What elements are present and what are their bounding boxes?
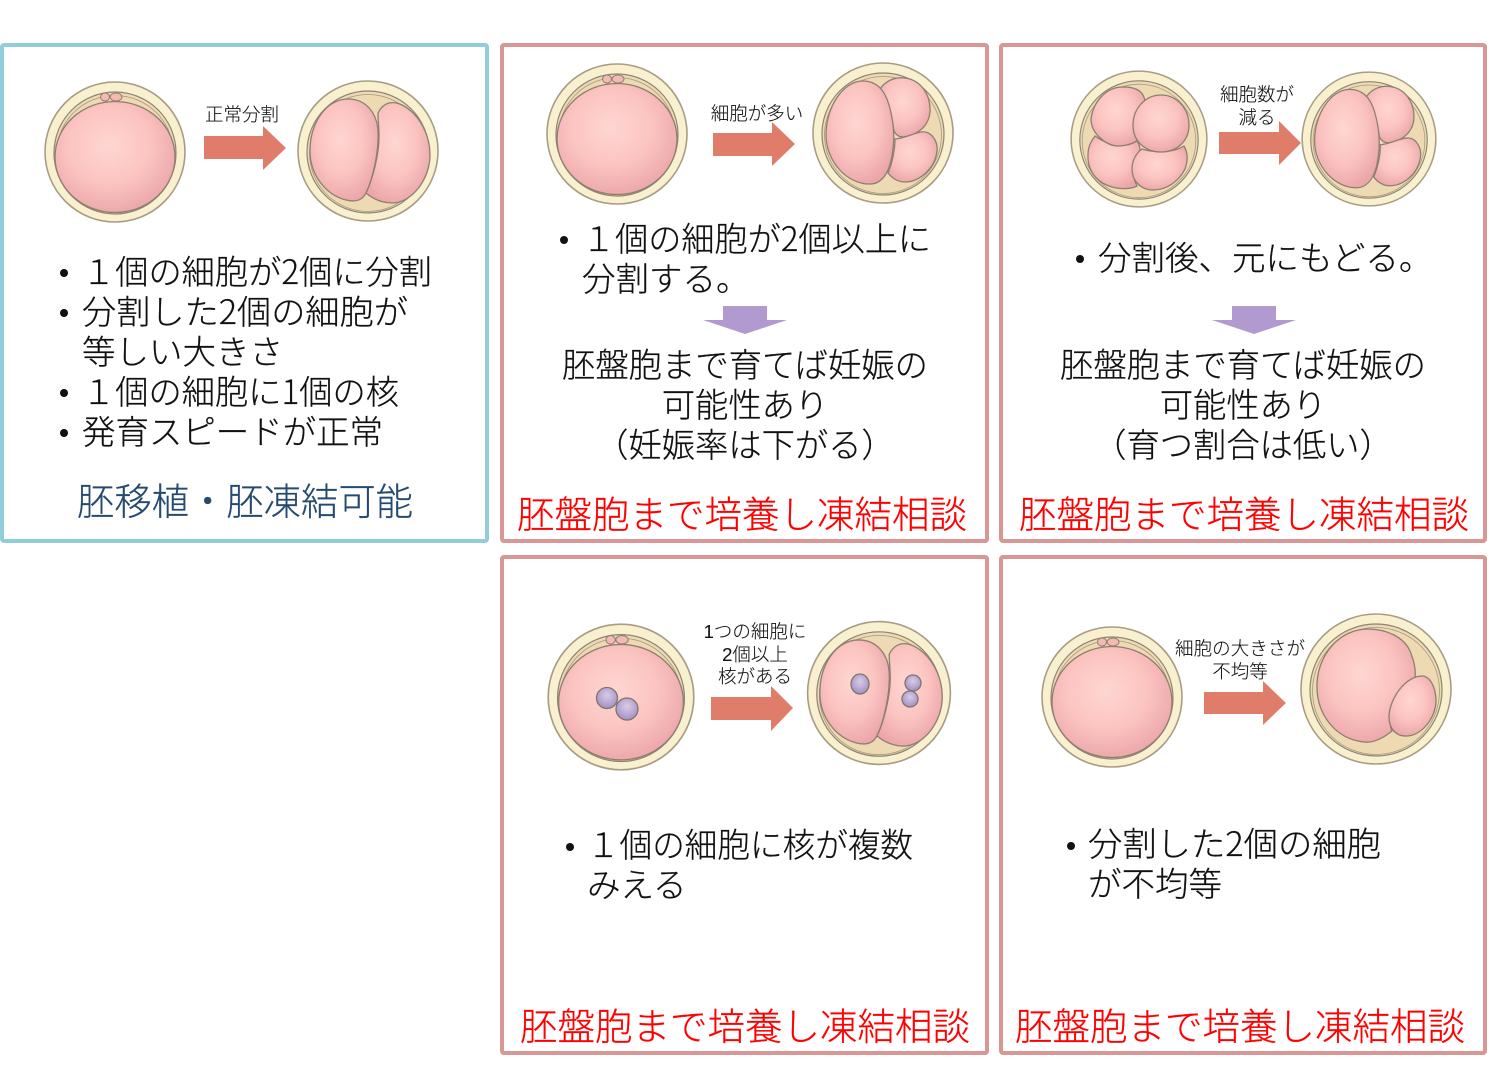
bullet list xyxy=(60,245,432,452)
arrow label: 不均等 xyxy=(1212,661,1268,682)
bullet text: 分割する。 xyxy=(582,262,750,299)
arrow label: 1つの細胞に xyxy=(704,621,806,642)
outcome text xyxy=(1060,348,1426,465)
recommendation: 胚盤胞まで培養し凍結相談 xyxy=(1019,494,1469,536)
arrow label xyxy=(704,621,806,687)
arrow label: 細胞が多い xyxy=(711,103,803,124)
icon: four-cell embryo xyxy=(1071,71,1207,207)
outcome text: 可能性あり xyxy=(662,388,828,425)
bullet text: １個の細胞に核が複数 xyxy=(587,828,913,865)
icon: one-cell embryo xyxy=(1042,627,1182,767)
bullet list: 等しい大きさ xyxy=(82,335,283,372)
bullet list: 分割した2個の細胞が xyxy=(82,285,408,334)
panel: multinucleated xyxy=(502,557,987,1053)
bullet text xyxy=(1067,817,1381,904)
arrow label xyxy=(1175,638,1305,682)
arrow label: 核がある xyxy=(718,666,792,687)
arrow label xyxy=(1220,84,1294,128)
panel: too many cells xyxy=(502,45,987,541)
arrow: down xyxy=(703,306,787,334)
recommendation: 胚盤胞まで培養し凍結相談 xyxy=(520,1006,970,1048)
icon: two-cell embryo xyxy=(298,81,438,221)
outcome text: 胚盤胞まで育てば妊娠の xyxy=(562,348,928,385)
icon: uneven two-cell embryo xyxy=(1301,614,1451,764)
outcome text: 胚盤胞まで育てば妊娠の xyxy=(1060,348,1426,385)
outcome text xyxy=(562,348,928,465)
recommendation: 胚盤胞まで培養し凍結相談 xyxy=(517,494,967,536)
bullet list: １個の細胞が2個に分割 xyxy=(82,245,432,294)
bullet list: １個の細胞に1個の核 xyxy=(82,365,399,414)
icon: two-cell embryo with multiple nuclei xyxy=(808,622,950,764)
arrow: more cells xyxy=(713,122,795,166)
icon: one-cell embryo xyxy=(547,64,687,204)
bullet text: が不均等 xyxy=(1088,867,1222,904)
bullet text: 分割後、元にもどる。 xyxy=(1098,241,1432,278)
outcome text: （妊娠率は下がる） xyxy=(595,428,895,465)
outcome text: 可能性あり xyxy=(1160,388,1326,425)
panel: normal cleavage xyxy=(2,45,487,541)
icon: one-cell embryo xyxy=(45,82,185,222)
bullet text xyxy=(560,212,931,299)
panel: uneven cell size xyxy=(1001,557,1485,1053)
outcome text: （育つ割合は低い） xyxy=(1093,428,1393,465)
bullet text: １個の細胞が2個以上に xyxy=(582,212,931,261)
bullet text: 分割した2個の細胞 xyxy=(1088,817,1381,866)
arrow label: 減る xyxy=(1238,107,1276,128)
arrow label: 細胞の大きさが xyxy=(1175,638,1305,659)
recommendation: 胚盤胞まで培養し凍結相談 xyxy=(1015,1006,1465,1048)
arrow: uneven division xyxy=(1204,681,1286,725)
arrow label: 細胞数が xyxy=(1220,84,1294,105)
arrow label: 正常分割 xyxy=(205,104,279,125)
arrow: normal cleavage xyxy=(204,126,286,170)
icon: three-cell embryo xyxy=(813,63,953,203)
bullet text: みえる xyxy=(587,868,686,905)
icon: one-cell embryo with two nuclei xyxy=(548,624,694,770)
arrow label: 2個以上 xyxy=(722,644,788,665)
bullet list: 発育スピードが正常 xyxy=(82,415,383,452)
arrow: multinucleation xyxy=(711,686,793,731)
conclusion: transfer or freeze: 胚移植・胚凍結可能 xyxy=(77,481,413,523)
arrow: down xyxy=(1212,306,1296,334)
arrow: fewer cells xyxy=(1219,121,1301,165)
bullet text xyxy=(566,828,913,905)
icon: three-cell embryo xyxy=(1302,72,1436,206)
panel: cell number decreases xyxy=(1001,45,1485,541)
